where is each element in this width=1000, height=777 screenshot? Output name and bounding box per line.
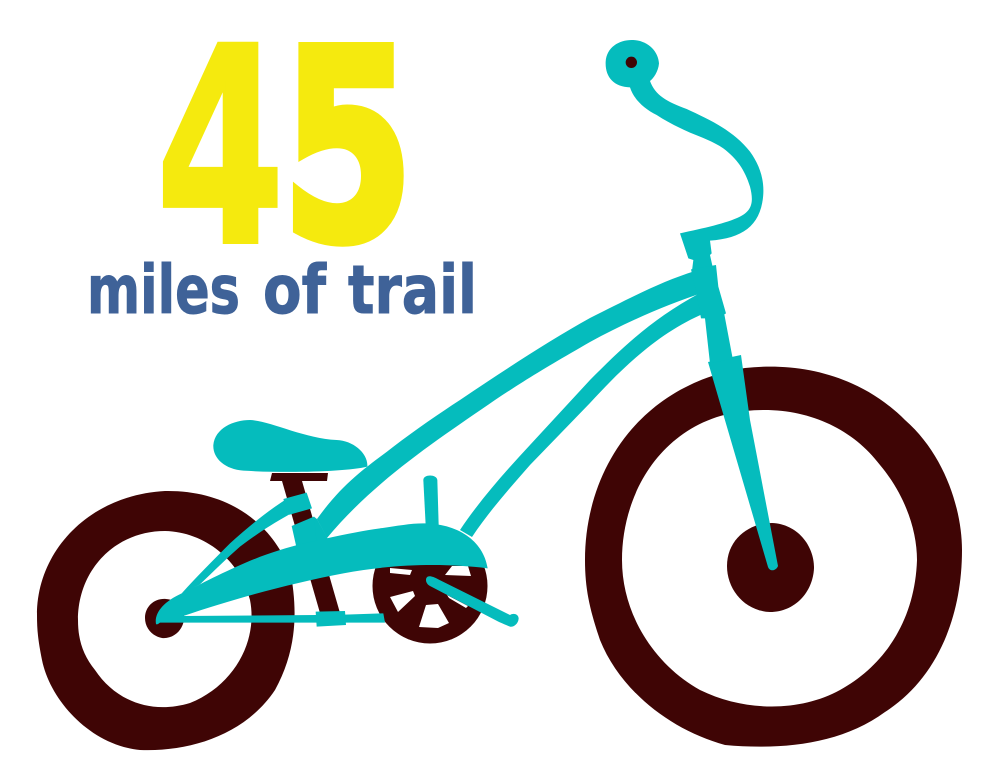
subtitle: miles of trail: of xyxy=(263,251,327,329)
chain stay clamp xyxy=(316,611,346,627)
seat stay xyxy=(182,500,288,593)
pedal post xyxy=(423,475,439,525)
crank arm and pedal xyxy=(426,576,519,627)
chain guard and chain stay xyxy=(156,523,488,624)
top tube xyxy=(317,271,705,538)
rear wheel xyxy=(37,491,295,750)
saddle xyxy=(213,420,367,472)
handlebar and head tube xyxy=(606,40,763,363)
seat tube lug xyxy=(292,517,327,548)
handlebar xyxy=(606,40,763,273)
subtitle: miles of trail xyxy=(87,251,477,329)
chainring xyxy=(372,528,488,644)
subtitle: miles of trail: miles xyxy=(87,251,240,329)
saddle, fender and rear frame xyxy=(156,420,519,627)
head tube xyxy=(691,265,733,363)
seat clamp xyxy=(283,493,312,515)
front wheel xyxy=(585,367,962,747)
big number: 45 xyxy=(156,0,413,306)
down tube xyxy=(460,293,705,537)
seat post stub xyxy=(314,517,328,543)
grip dot xyxy=(626,57,637,68)
front fork xyxy=(708,355,778,570)
big number: 45: 5 xyxy=(282,0,413,300)
subtitle: miles of trail: trail xyxy=(348,251,477,329)
seat post xyxy=(270,473,340,613)
